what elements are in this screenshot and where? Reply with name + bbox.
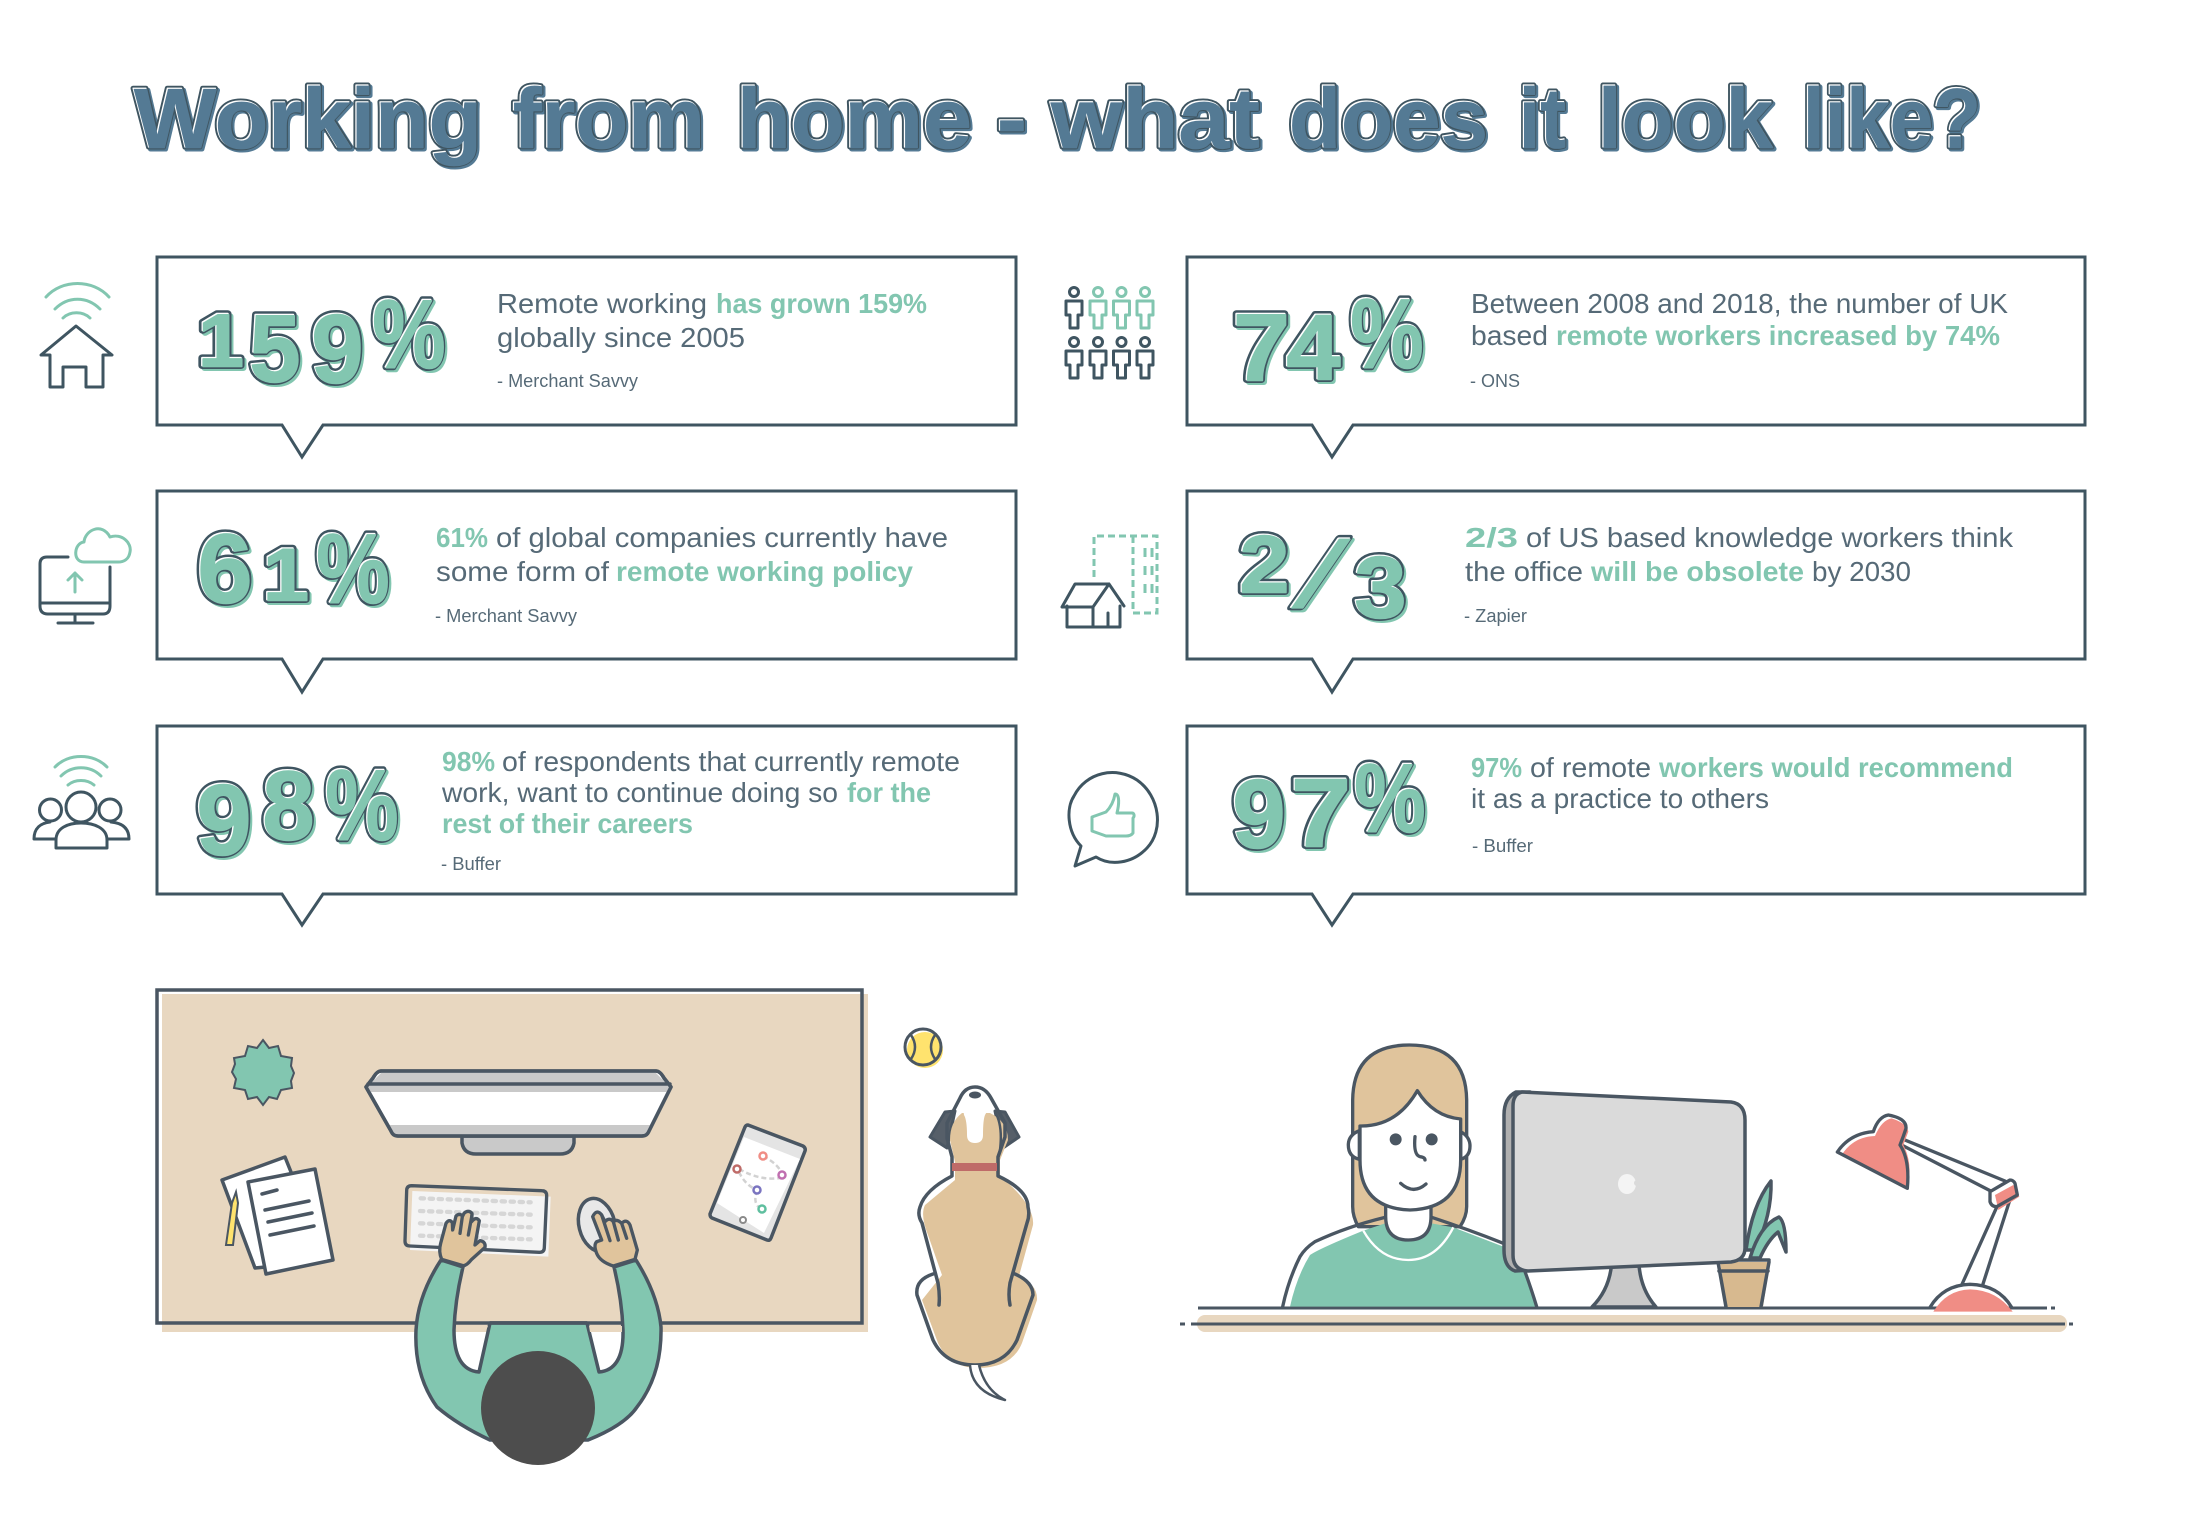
- title: like?: [1803, 72, 1981, 167]
- title: it: [1519, 72, 1566, 167]
- title: it: [1520, 73, 1567, 168]
- stat text: workers would recommend: [1658, 752, 2013, 783]
- big number: 74%: 4: [1286, 296, 1341, 400]
- stat text: it as a practice to others: [1471, 783, 1769, 814]
- big number: 159%: %: [372, 278, 444, 388]
- title: Working: [134, 72, 482, 167]
- big number: 97%: 9: [1232, 758, 1284, 868]
- stat text: [1471, 752, 2013, 856]
- stat text: remote working policy: [616, 556, 913, 587]
- big number: 159%: %: [374, 281, 447, 390]
- big number: 2/3: /: [1284, 525, 1360, 627]
- big number: 98%: 8: [262, 750, 314, 860]
- stat text: - Merchant Savvy: [497, 371, 638, 391]
- title: it: [1518, 71, 1565, 166]
- monitor from above: [366, 1071, 671, 1154]
- computer: [1504, 1092, 1745, 1307]
- stat text: the office: [1465, 556, 1583, 587]
- big number: 98%: 9: [196, 764, 250, 876]
- big number: 2/3: /: [1281, 522, 1358, 625]
- big number: 97%: 7: [1292, 760, 1352, 869]
- panel: 74% stat: [1187, 257, 2085, 457]
- big number: 61%: %: [316, 514, 390, 624]
- left hand: [440, 1211, 485, 1266]
- icon: house with wifi: [41, 284, 112, 387]
- title: Working: [135, 73, 483, 168]
- stat text: Remote working: [497, 288, 707, 319]
- big number: 159%: 5: [248, 294, 300, 402]
- title: like?: [1804, 73, 1982, 168]
- title: look: [1598, 72, 1774, 167]
- big number: 2/3: 2: [1238, 518, 1288, 610]
- title: home: [738, 73, 973, 168]
- title: what: [1050, 72, 1260, 167]
- title: look: [1599, 73, 1775, 168]
- stat text: [1470, 288, 2008, 391]
- icon: office and house: [1062, 536, 1157, 627]
- big number: 159%: %: [372, 280, 446, 388]
- big number: 159%: [197, 278, 447, 405]
- big number: 97%: [1232, 742, 1427, 870]
- big number: 159%: %: [372, 278, 444, 388]
- big number: 2/3: 3: [1354, 538, 1406, 636]
- desk: [157, 990, 868, 1332]
- big number: 74%: 7: [1232, 294, 1289, 400]
- big number: 2/3: 2: [1238, 518, 1288, 610]
- big number: 61%: 6: [198, 514, 252, 624]
- stat text: rest of their careers: [442, 808, 693, 839]
- stat text: 61%: [436, 522, 488, 553]
- title: Working: [133, 71, 481, 166]
- title: what: [1051, 73, 1261, 168]
- big number: 159%: 9: [313, 296, 365, 405]
- big number: 61%: %: [316, 512, 388, 622]
- panel: 159% stat: [157, 257, 1016, 457]
- big number: 159%: 1: [197, 298, 243, 382]
- big number: 2/3: 2: [1241, 521, 1291, 612]
- title: look: [1597, 71, 1773, 166]
- title: -: [996, 71, 1026, 166]
- panel: 97% stat: [1187, 726, 2085, 925]
- big number: 98%: 9: [196, 764, 252, 876]
- tablet: [710, 1125, 805, 1240]
- big number: 74%: 4: [1286, 294, 1340, 398]
- big number: 97%: %: [1354, 742, 1424, 852]
- big number: 2/3: /: [1282, 523, 1359, 626]
- big number: 159%: 9: [312, 294, 364, 404]
- title: what: [1049, 71, 1259, 166]
- big number: 74%: [1232, 278, 1425, 403]
- big number: 2/3: 3: [1354, 538, 1406, 636]
- big number: 98%: 8: [264, 752, 316, 862]
- big number: 159%: 5: [248, 294, 300, 402]
- title: [133, 71, 1982, 168]
- title: look: [1597, 71, 1773, 166]
- woman: [1283, 1045, 1537, 1307]
- stat text: Between 2008 and 2018, the number of UK: [1471, 288, 2008, 319]
- stat text: - Buffer: [441, 854, 501, 874]
- title: home: [736, 71, 971, 166]
- panel: 61% stat: [157, 491, 1016, 692]
- dog: [917, 1087, 1037, 1400]
- title: from: [514, 73, 706, 168]
- big number: 61%: %: [318, 515, 391, 625]
- title: what: [1049, 71, 1259, 166]
- stat text: - Buffer: [1472, 836, 1533, 856]
- stat text: - Merchant Savvy: [435, 606, 577, 626]
- big number: 2/3: /: [1281, 522, 1358, 625]
- desk lamp: [1837, 1115, 2019, 1312]
- big number: 97%: 7: [1290, 758, 1350, 866]
- stat text: some form of: [436, 556, 609, 587]
- stat text: remote workers increased by 74%: [1556, 320, 2000, 351]
- big number: 74%: %: [1350, 278, 1422, 388]
- stat text: for the: [847, 777, 931, 808]
- big number: 2/3: 3: [1356, 541, 1408, 638]
- stat text: will be obsolete: [1590, 556, 1804, 587]
- stat text: based: [1471, 320, 1548, 351]
- big number: 98%: %: [327, 751, 400, 863]
- stat text: of respondents that currently remote: [502, 746, 960, 777]
- big number: 159%: 9: [310, 294, 362, 402]
- big number: 98%: %: [326, 750, 398, 862]
- mouse: [573, 1194, 621, 1256]
- big number: 61%: 6: [199, 515, 254, 625]
- title: does: [1288, 71, 1487, 166]
- big number: 98%: %: [324, 748, 398, 860]
- big number: 98%: [196, 748, 400, 878]
- illustration: dog and ball: [905, 1029, 1037, 1400]
- big number: 74%: %: [1350, 278, 1422, 388]
- stat text: of remote: [1530, 752, 1651, 783]
- title: from: [512, 71, 704, 166]
- big number: 159%: 9: [310, 294, 362, 402]
- big number: 74%: 4: [1286, 294, 1340, 398]
- stat text: - ONS: [1470, 371, 1520, 391]
- stat text: [1464, 522, 2014, 626]
- icon: workers grid: [1066, 288, 1153, 378]
- big number: 2/3: 2: [1240, 520, 1290, 610]
- big number: 74%: 7: [1232, 294, 1289, 400]
- illustration: desk from above: [157, 990, 868, 1465]
- big number: 159%: 5: [250, 296, 300, 402]
- big number: 61%: 1: [262, 532, 308, 616]
- big number: 61%: [196, 512, 391, 625]
- title: -: [998, 73, 1028, 168]
- big number: 97%: %: [1356, 745, 1427, 854]
- big number: 74%: %: [1352, 280, 1425, 390]
- big number: 97%: 9: [1234, 761, 1287, 870]
- table lines: [1180, 1308, 2073, 1332]
- big number: 97%: 7: [1290, 758, 1350, 866]
- panel: 2/3 stat: [1187, 491, 2085, 692]
- right hand: [593, 1212, 637, 1266]
- big number: 61%: 1: [263, 534, 309, 616]
- big number: 74%: 7: [1233, 294, 1290, 402]
- illustration: woman at desk: [1180, 1045, 2073, 1332]
- big number: 2/3: [1238, 518, 1408, 638]
- stat text: 97%: [1471, 752, 1522, 783]
- title: does: [1290, 73, 1489, 168]
- big number: 98%: 9: [196, 764, 250, 876]
- icon: cloud and monitor: [40, 529, 130, 623]
- big number: 74%: %: [1350, 278, 1424, 388]
- stat text: has grown 159%: [716, 288, 927, 319]
- title: from: [513, 72, 705, 167]
- big number: 98%: %: [324, 748, 398, 860]
- big number: 98%: 9: [198, 766, 253, 878]
- title: from: [512, 71, 704, 166]
- big number: 74%: 4: [1288, 297, 1342, 401]
- big number: 2/3: 3: [1354, 540, 1406, 636]
- stat text: [497, 288, 927, 391]
- title: does: [1288, 71, 1487, 166]
- big number: 61%: 6: [196, 512, 252, 622]
- stat text: [435, 522, 948, 626]
- tennis ball: [905, 1029, 943, 1068]
- stat text: of global companies currently have: [496, 522, 948, 553]
- big number: 97%: 7: [1291, 758, 1351, 868]
- big number: 97%: %: [1354, 742, 1424, 852]
- stat text: 98%: [442, 746, 495, 777]
- title: -: [997, 72, 1027, 167]
- big number: 98%: 8: [262, 750, 314, 860]
- stat text: 2/3: [1465, 522, 1518, 553]
- big number: 61%: 1: [264, 535, 310, 618]
- icon: team with wifi: [34, 756, 129, 848]
- stat text: of US based knowledge workers think: [1526, 522, 2014, 553]
- title: Working: [133, 71, 481, 166]
- big number: 159%: 1: [200, 300, 246, 384]
- big number: 159%: 5: [251, 297, 302, 404]
- person from above: [416, 1260, 661, 1465]
- panel: 98% stat: [157, 726, 1016, 925]
- stat text: work, want to continue doing so: [441, 777, 838, 808]
- big number: 61%: 6: [196, 512, 252, 622]
- papers and pencil: [222, 1157, 333, 1274]
- big number: 98%: 8: [262, 750, 314, 860]
- title: does: [1289, 72, 1488, 167]
- big number: 97%: %: [1354, 744, 1426, 852]
- plant: [1718, 1181, 1786, 1307]
- big number: 97%: 9: [1232, 758, 1284, 868]
- title: like?: [1802, 71, 1980, 166]
- keyboard: [405, 1186, 551, 1257]
- title: like?: [1802, 71, 1980, 166]
- stat text: by 2030: [1812, 556, 1911, 587]
- big number: 159%: 1: [197, 298, 243, 382]
- title: -: [996, 71, 1026, 166]
- stat text: - Zapier: [1464, 606, 1527, 626]
- stat text: globally since 2005: [497, 322, 745, 353]
- big number: 61%: %: [316, 512, 388, 622]
- big number: 159%: 1: [198, 298, 244, 382]
- big number: 74%: 7: [1234, 296, 1292, 403]
- stat text: [441, 746, 960, 874]
- title: home: [737, 72, 972, 167]
- title: it: [1518, 71, 1565, 166]
- big number: 61%: 1: [262, 532, 308, 616]
- icon: thumbs up speech bubble: [1069, 773, 1157, 866]
- big number: 97%: 9: [1232, 760, 1286, 868]
- title: home: [736, 71, 971, 166]
- plant from above: [232, 1040, 294, 1105]
